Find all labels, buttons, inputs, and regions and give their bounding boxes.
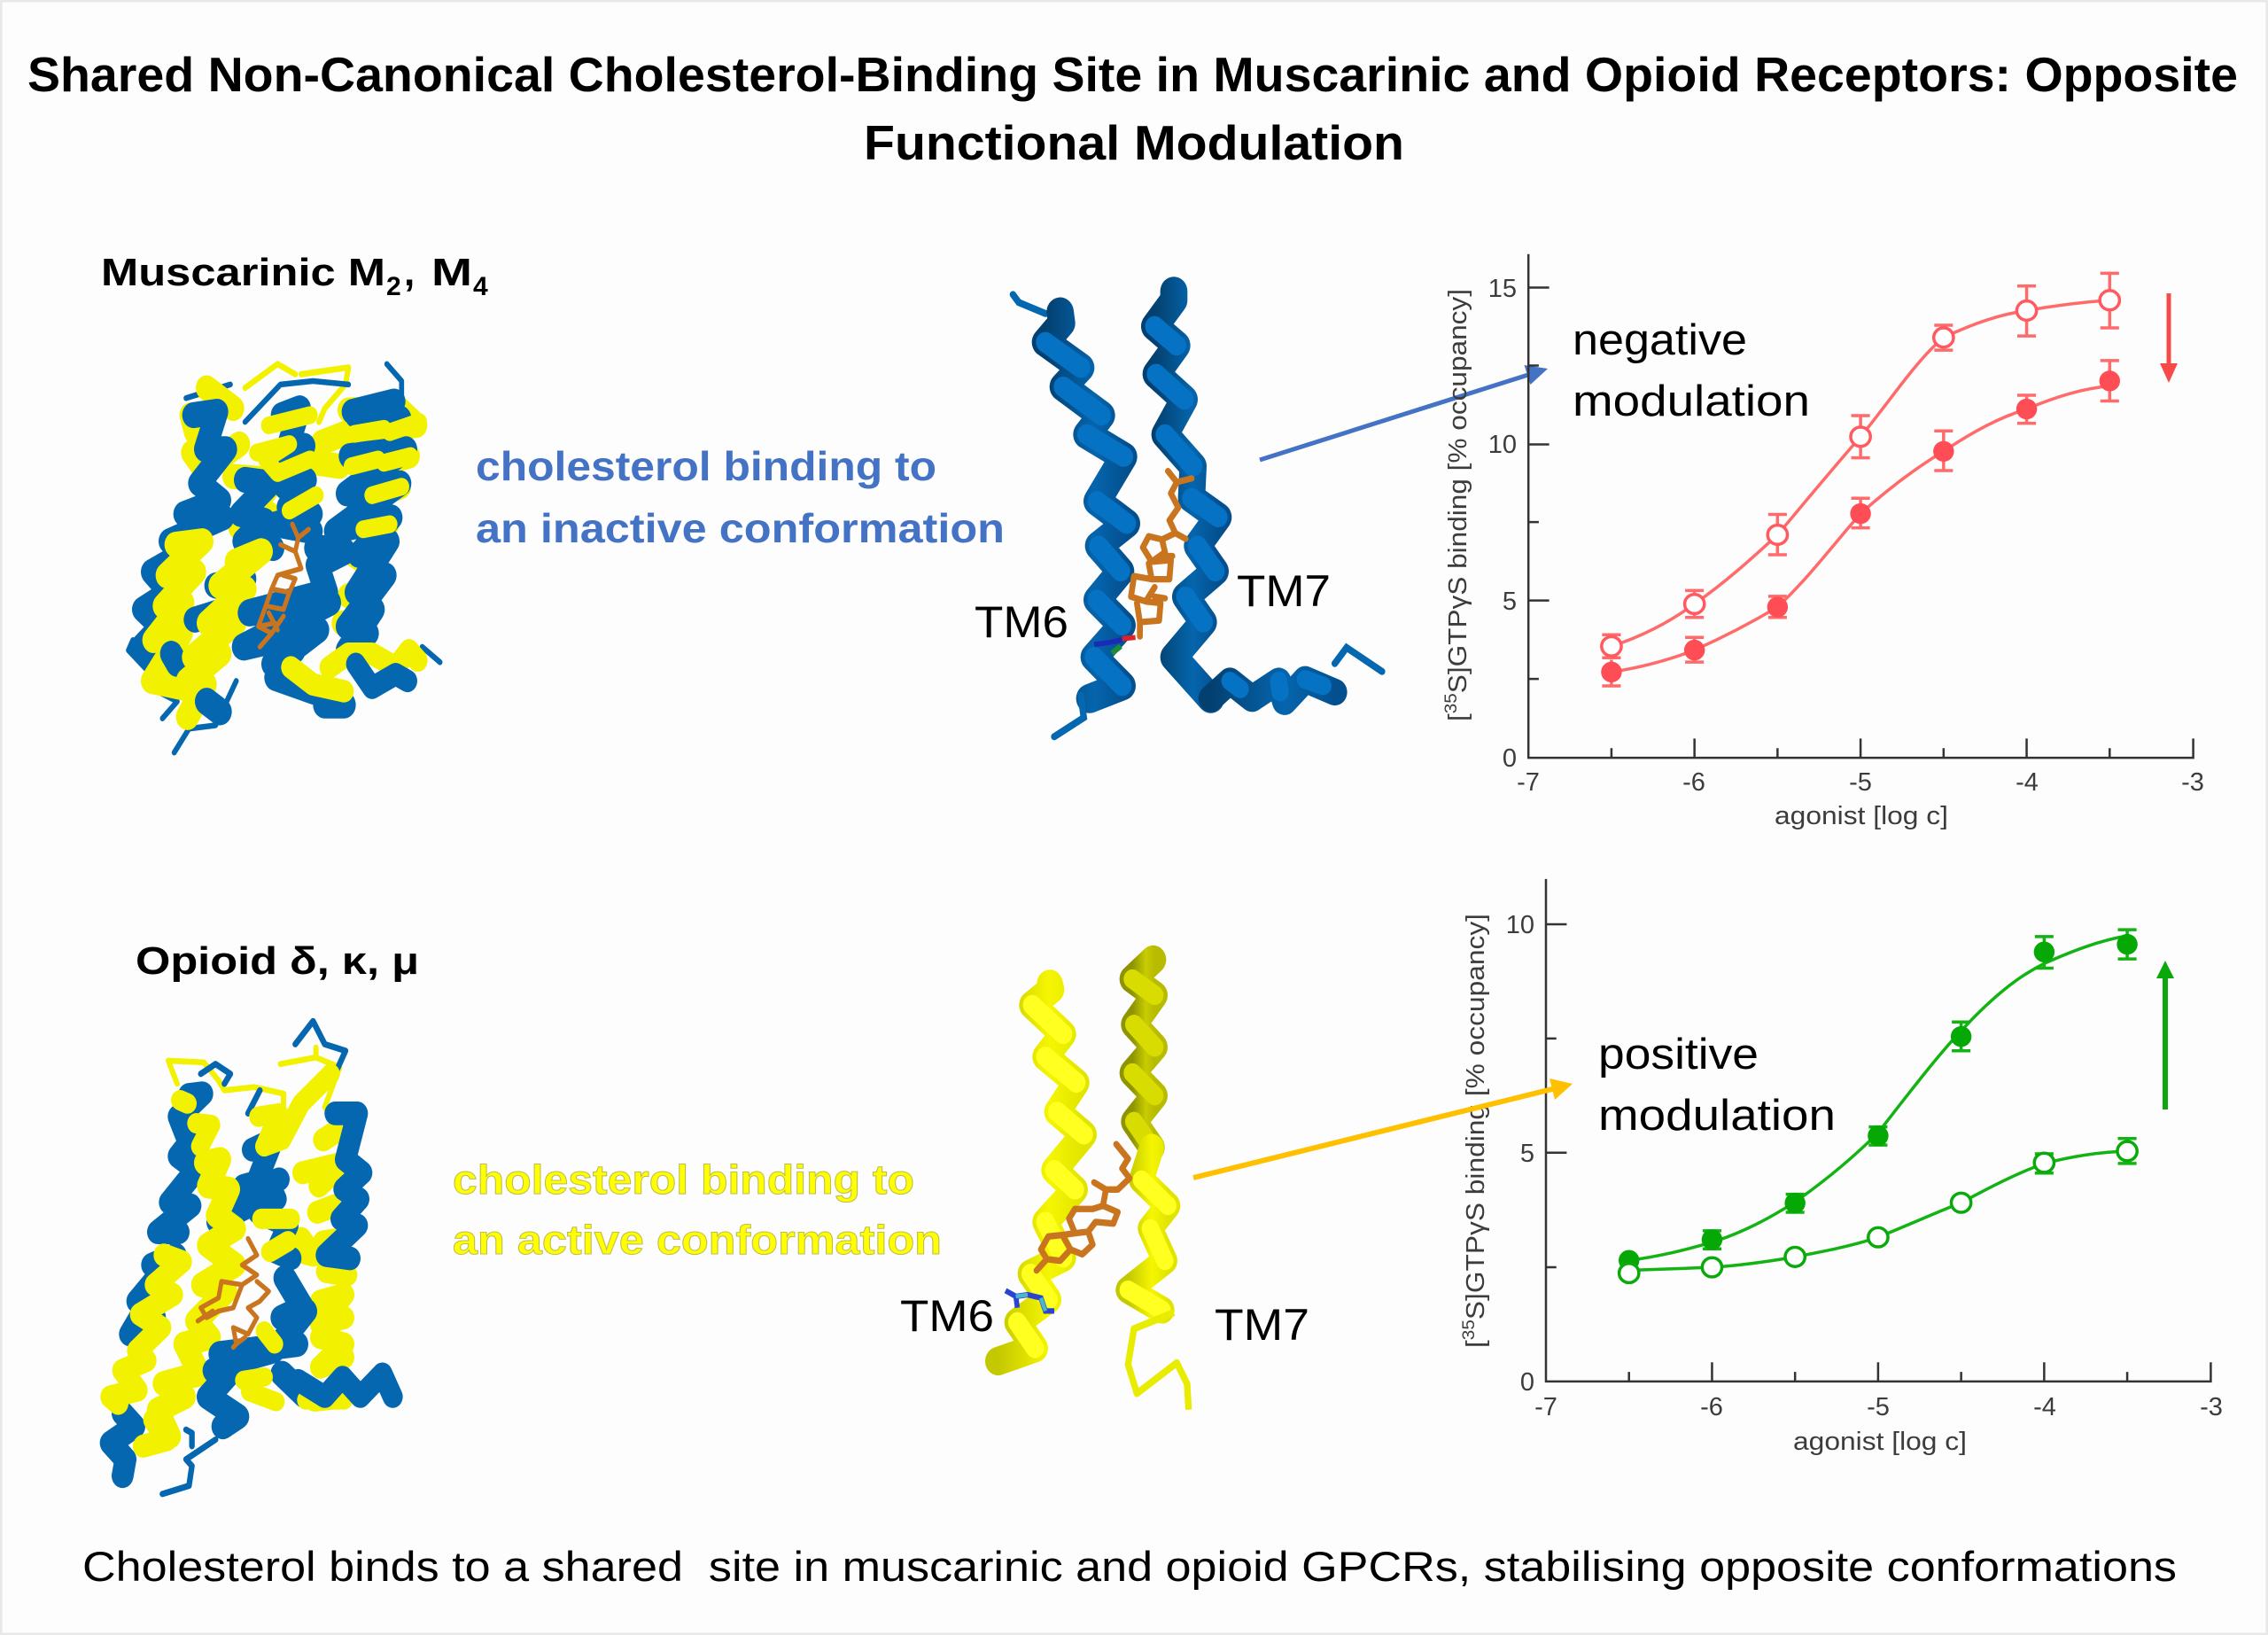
label: TM7: TM7 — [1237, 566, 1331, 616]
arrow: red downward — [2160, 293, 2178, 383]
heading: muscarinic: Muscarinic M — [101, 251, 385, 294]
label: cholesterol binding to an inactive conformation: an inactive conformation — [476, 505, 1005, 551]
label: TM7: TM7 — [1215, 1300, 1309, 1350]
chart: negative modulation: [ — [1444, 714, 1472, 721]
heading: muscarinic: 2 — [386, 272, 401, 301]
chart: negative modulation: -7 — [1517, 768, 1540, 797]
chart: positive modulation: S]GTPγS binding [% occupancy] — [1462, 914, 1490, 1320]
label: negative modulation: negative — [1573, 316, 1747, 364]
chart: negative modulation: 15 — [1488, 275, 1517, 303]
caption: Cholesterol binds to a shared site in muscarinic and opioid GPCRs, stabilising opposite conformations — [82, 1543, 2177, 1590]
chart: negative modulation: -4 — [2016, 768, 2039, 797]
title: Functional Modulation — [864, 115, 1404, 170]
arrow: blue — [1260, 365, 1548, 460]
chart: positive modulation: 35 — [1460, 1320, 1479, 1340]
chart: negative modulation: -3 — [2181, 768, 2204, 797]
chart: negative modulation: 35 — [1442, 693, 1461, 713]
label: cholesterol binding to an active conformation: an active conformation — [453, 1217, 942, 1263]
chart: positive modulation: 0 — [1520, 1368, 1534, 1397]
label: cholesterol binding to an inactive conformation — [476, 443, 1005, 551]
chart: positive modulation: [ — [1462, 1341, 1490, 1348]
chart: negative modulation: -5 — [1849, 768, 1872, 797]
structure: blue TM6 and TM7 helices — [1013, 292, 1382, 736]
label: positive modulation: modulation — [1598, 1092, 1836, 1140]
label: cholesterol binding to an active conformation: cholesterol binding to — [453, 1156, 914, 1203]
chart: positive modulation: 5 — [1520, 1140, 1534, 1168]
chart: negative modulation: -6 — [1682, 768, 1705, 797]
label: negative modulation: modulation — [1573, 378, 1810, 425]
label: positive modulation — [1598, 1031, 1836, 1140]
label: TM6: TM6 — [900, 1291, 994, 1341]
label: cholesterol binding to an active conformation — [453, 1156, 942, 1263]
structure: yellow TM6 and TM7 helices — [998, 960, 1189, 1410]
chart: negative modulation: 5 — [1503, 588, 1517, 616]
chart: negative modulation — [1442, 254, 2204, 830]
label: cholesterol binding to an inactive conformation: cholesterol binding to — [476, 443, 936, 489]
heading: muscarinic — [101, 251, 488, 301]
structure: muscarinic overlay — [128, 364, 440, 752]
title: Shared Non-Canonical Cholesterol-Binding Site in Muscarinic and Opioid Receptors: Opposite — [27, 47, 2238, 102]
label: positive modulation: positive — [1598, 1031, 1759, 1078]
heading: muscarinic: 4 — [473, 272, 488, 301]
structure: opioid overlay — [111, 1021, 392, 1494]
chart: positive modulation: -7 — [1534, 1393, 1557, 1421]
arrow: green upward — [2156, 961, 2174, 1109]
chart: positive modulation: -6 — [1700, 1393, 1723, 1421]
chart: positive modulation: -3 — [2200, 1393, 2223, 1421]
chart: positive modulation — [1460, 879, 2223, 1456]
heading: opioid: Opioid δ, κ, μ — [136, 939, 419, 983]
chart: positive modulation: agonist [log c] — [1793, 1428, 1967, 1456]
chart: negative modulation: S]GTPγS binding [% occupancy] — [1444, 289, 1472, 693]
heading: muscarinic: , — [404, 251, 415, 294]
title — [27, 47, 2238, 170]
heading: muscarinic: M — [431, 251, 472, 294]
arrow: yellow — [1193, 1078, 1573, 1178]
chart: positive modulation: 10 — [1506, 911, 1534, 939]
chart: negative modulation: agonist [log c] — [1775, 802, 1948, 830]
label: negative modulation — [1573, 316, 1810, 425]
chart: negative modulation: 0 — [1503, 744, 1517, 773]
chart: positive modulation: -4 — [2033, 1393, 2056, 1421]
label: TM6: TM6 — [975, 597, 1068, 647]
chart: negative modulation: 10 — [1488, 431, 1517, 459]
chart: positive modulation: -5 — [1867, 1393, 1890, 1421]
